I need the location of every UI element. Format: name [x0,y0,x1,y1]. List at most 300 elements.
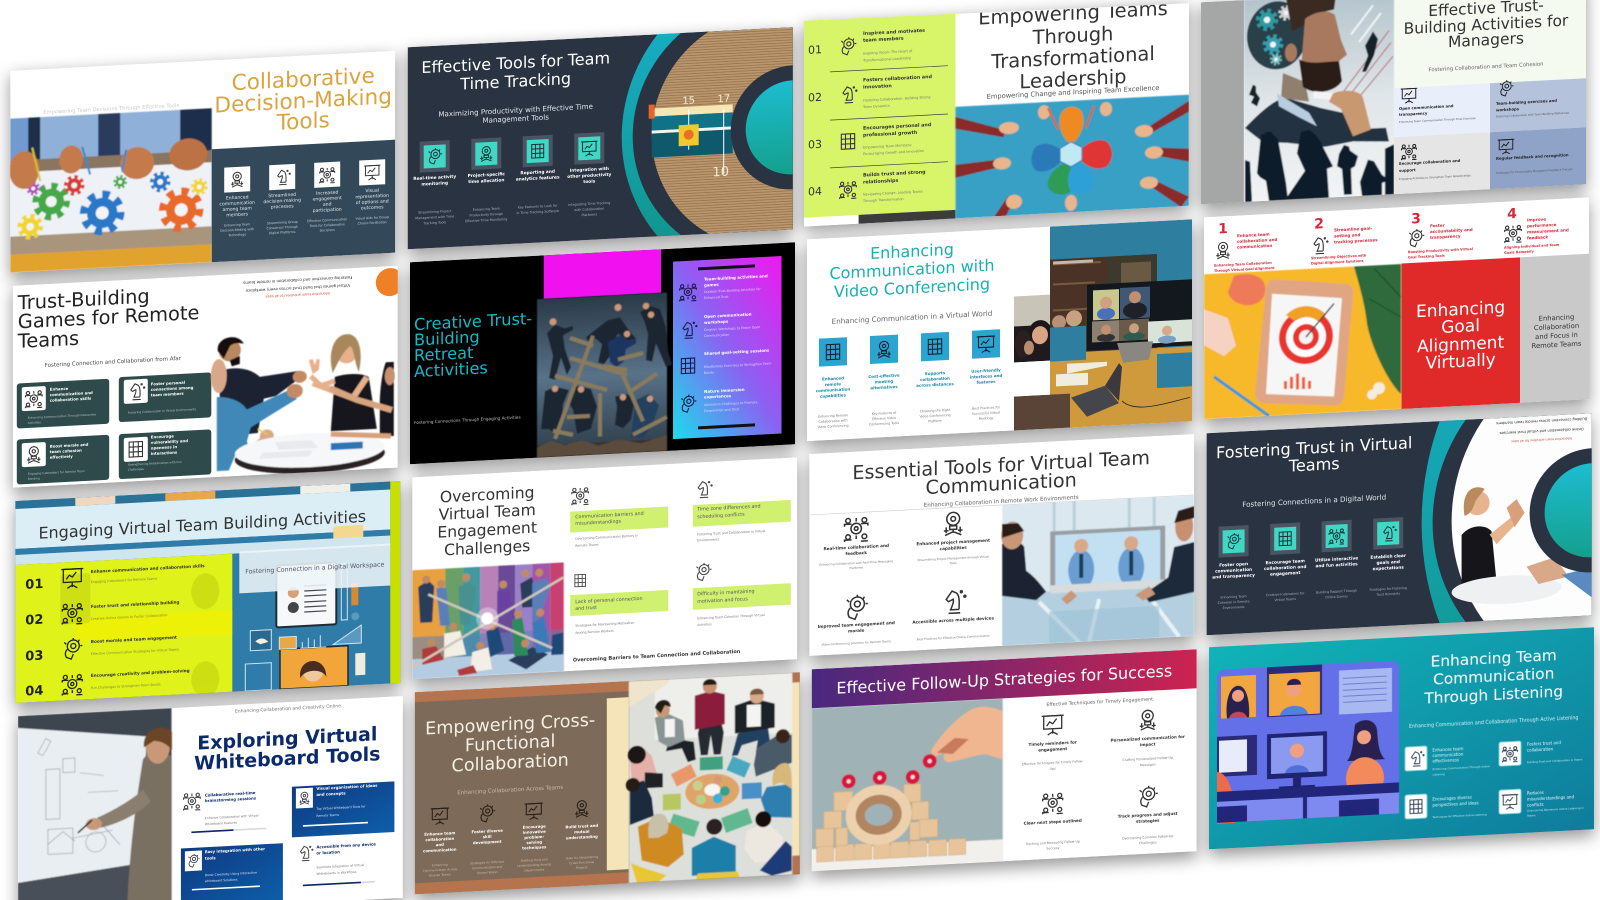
grey subtitle panel: Enhancing [1539,313,1574,323]
dark feature panel: Enhancing Team [224,222,250,228]
panel: Enhancing Team Communication Through Listening slide [1209,627,1594,849]
tool features grid: capabilities [940,545,967,551]
listening benefits [1405,738,1584,824]
goals list strip: Aligning Individual and Team [1504,243,1560,250]
challenge cards: scheduling conflicts [697,512,745,520]
goals list strip: Streamline goal- [1334,226,1373,233]
strategy grid: Overcoming Common Follow-Up [1122,834,1173,841]
cards: Encourage [151,433,174,440]
panel: Overcoming Virtual Team Engagement Challenges slide [412,457,797,679]
feature columns: development [473,839,502,845]
tiles: manager activities: support [1399,167,1416,173]
panel: Enhancing Goal Alignment Virtually slide [1204,197,1589,419]
challenge cards: Enhancing Team Cohesion Through Virtual [697,613,765,620]
white cards: brainstorming sessions [205,795,257,803]
numbered list: professional growth [863,130,918,139]
subtitle: Management Tools [482,112,549,125]
feature icons row: Virtual Teams [1274,597,1296,602]
blue cards: Remote Teams [316,813,339,818]
subtitle: Fostering Collaboration and Team Cohesion [1429,61,1543,73]
feature columns: Conferencing Tools [869,421,899,426]
cards: interactions [151,450,178,456]
feature columns: interfaces and [970,373,1002,380]
challenge cards: Communication barriers and [575,511,644,520]
dark feature panel: Technology [227,232,246,237]
goals list strip: feedback [1527,234,1548,241]
dark feature panel: members [226,211,249,219]
title: Functional [465,732,555,756]
panel: Essential Tools for Virtual Team Communication slide [809,434,1194,656]
cards: vulnerability and [151,438,188,445]
feature icons row: Foster open [1219,561,1248,569]
feature columns: Enhance team [424,830,455,837]
feature icons row: Integration with [570,166,609,174]
gradient activity panel: games [704,282,719,288]
feature columns: communication [423,847,457,853]
feature columns: meeting [875,379,893,384]
graphic: circular wood clock photo: 10 [712,165,729,180]
feature icons row: Reporting and [520,169,555,176]
feature icons row: in Time Tracking Software [516,209,559,215]
feature columns: and [436,842,444,847]
photo: colleagues high-five at table [211,329,395,478]
gradient activity panel: Cooperation and Trust [704,407,740,413]
numbered list [808,27,948,206]
goals list strip: 3 [1411,211,1421,228]
goals list strip: 1 [1218,221,1228,238]
gradient activity panel: Bonds [704,370,714,375]
feature columns: Cross-Functional [569,860,594,865]
feature columns: techniques [522,844,547,851]
photo: hand placing pin on wooden blocks [812,698,1003,871]
dark feature panel [212,140,395,262]
challenge cards: Lack of personal connection [575,596,643,605]
yellow numbered panel: Fun Challenges to Strengthen Team Bonds [91,682,161,690]
feature icons row: and fun activities [1315,561,1358,569]
title: Essential Tools for Virtual Team [852,446,1150,484]
tool features grid: Streamlining Project Management through Virtual [917,554,989,562]
goals list strip: collaboration and [1237,237,1277,244]
title: Virtual Team [439,501,536,524]
tool features grid [818,510,995,647]
blue cards: Top Virtual Whiteboard Tools for [315,804,366,811]
feature columns: Strategies for Effective [470,860,505,865]
dark feature panel: Streamlined [268,192,296,199]
tool features grid: Best Practices for Effective Online Communication [917,634,990,641]
title: Communication [926,468,1077,499]
tiles: manager activities: Fostering Collaboration with Team-Building Workshops [1496,111,1570,118]
photo: diverse team pulling ropes [412,562,564,679]
dark feature panel: Tools for Collaborative [309,222,345,228]
white cards: Collaborative real-time [205,790,256,798]
feature columns [423,799,598,878]
numbered list: Inspiring Vision: The Heart of [863,49,913,56]
cards: team members [151,391,184,398]
panel: Effective Trust-Building Activities for Managers slide [1201,0,1586,204]
upside-down header text: Virtual games that build trust across every workplace [245,283,350,294]
upside-down header text: Online collaboration and virtual trust exercises [1499,427,1584,435]
tiles: manager activities: Engaging Activities to Strengthen Team Relationships [1399,173,1471,181]
numbered list: 01 [808,43,822,57]
numbered list: relationships [863,178,898,186]
dark feature panel: Streamlining Group [267,220,298,225]
strategy grid: Effective Techniques for Timely Follow- [1022,759,1084,766]
panel: Fostering Trust in Virtual Teams slide [1207,201,1600,826]
feature icons row: other productivity [567,172,612,180]
title: Activities [414,358,488,381]
feature icons row: tools [583,179,596,185]
title: Challenges [444,537,530,559]
tiles: manager activities: transparency [1399,111,1428,117]
numbered list: Team Dynamics [862,104,890,109]
subtitle: Maximizing Productivity with Effective Time [438,102,593,119]
challenge cards: and trust [575,605,597,612]
cards: team cohesion [50,448,82,454]
tool features grid: Real-time collaboration and [823,543,889,551]
title: Transformational [990,42,1155,74]
upside-down header text: Interactive team activities for all sizes [1511,436,1572,443]
gradient activity panel: Outdoor Trust-Building Activities for [704,287,761,294]
cards: Fostering Collaboration in Virtual Environments [128,407,197,415]
blue cards: Boost Creativity Using Interactive [205,871,257,877]
feature icons row: Project-specific [468,171,505,179]
listening benefits: misunderstandings and [1527,794,1574,802]
panel: Effective Tools for Team Time Tracking slide [408,27,793,250]
strategy grid: Messages [1140,762,1156,767]
yellow numbered panel: Engaging Icebreakers for Remote Teams [91,577,158,584]
upside-down header text: Building connection across remote team members [1496,417,1587,425]
goals list strip [1214,203,1569,273]
blue cards: and concepts [316,790,346,797]
feature icons row: Establish clear [1370,553,1407,561]
red title panel [1402,257,1520,409]
title: Whiteboard Tools [194,743,380,775]
yellow numbered panel: 03 [25,649,43,664]
dark feature panel: Decisions [320,228,335,233]
numbered list: Inspires and motivates [863,28,925,37]
strategy grid: Crafting Personalized Follow-Up [1123,756,1173,762]
feature icons row: Creative Icebreakers for [1266,591,1305,597]
photo: team sitting in a circle [626,672,800,883]
challenge cards: motivation and focus [697,596,748,605]
title: Collaboration [452,751,569,777]
feature columns: understanding [566,834,598,840]
goals list strip: Foster [1430,223,1445,228]
subtitle: Fostering Connections in a Digital World [1242,493,1386,509]
title: Engagement [437,519,537,542]
title: Building [414,327,480,350]
tool features grid: Accessible across multiple devices [912,615,995,625]
dark feature panel: of options and [356,198,389,206]
blue cards: whiteboard Solutions [205,878,238,883]
dark feature panel: Visual Aids for Group [356,215,389,221]
tool features grid: Enhanced project management [916,538,990,546]
feature columns: Key Features of [872,411,897,416]
title: Through Listening [1423,682,1563,707]
red title panel: Enhancing [1416,298,1505,322]
title: Fostering Trust in Virtual [1216,433,1412,462]
challenge cards: Among Remote Workers [575,629,614,635]
subtitle: Effective Techniques for Timely Engagement [1046,697,1153,708]
title: Communication with [829,256,995,283]
goals list strip: Goal Tracking Tools [1408,254,1445,260]
numbered list: Empowering Team Members: [863,143,912,150]
graphic: circular photo of team high-five [1422,201,1600,815]
feature columns: Enhancing [432,863,448,867]
tiles: manager activities: Enhancing Team Communication Through Trust Exercises [1399,116,1476,124]
feature columns: communication [816,386,850,393]
red title panel: Alignment [1417,333,1504,357]
title: Enhancing Team [1431,646,1557,671]
dark feature panel: Decision-Making with [220,227,254,233]
feature icons row: Enhancing Team [1221,594,1247,600]
dark feature panel: engagement [313,195,342,203]
title: Overcoming [440,484,535,506]
feature icons row: monitoring [421,180,448,188]
goals list strip: Boosting Productivity with Virtual [1408,247,1473,254]
dark feature panel: Enhanced [226,194,249,201]
cards: Strengthening Relationships with Fun [128,460,182,467]
challenge cards: Strategies for Maintaining Motivation [575,621,634,628]
subtitle: Fostering Connection and Collaboration from Afar [45,356,182,369]
feature icons row: communication [1215,567,1252,575]
challenge cards: Environments [697,537,720,542]
red title panel: Virtually [1425,350,1496,374]
feature icons row: collaboration and [1264,564,1306,572]
feature columns: Enhanced [822,375,844,382]
listening benefits: Teams [1526,813,1536,818]
numbered list: Navigating Change: Leading Teams [863,190,923,197]
feature icons row: Strategies for Fostering [1369,586,1407,592]
dark feature panel: communication [219,200,255,208]
cards: effectively [50,454,73,460]
title: Games for Remote [18,301,199,333]
strategy grid: Success [1046,846,1059,851]
feature icons row: Cohesion in Remote [1218,599,1250,605]
feature icons row: analytics features [516,174,560,183]
challenge cards: Activities [697,622,712,627]
listening benefits: Encourages diverse [1433,795,1472,802]
red title panel: Goal [1441,316,1480,338]
feature columns: problem- [524,834,544,840]
feature columns: User-friendly [971,367,1001,374]
goals list strip: transparency [1430,233,1461,240]
blue cards [181,781,394,900]
challenge cards: Remote Teams [575,543,599,548]
photo: bearded man profile with gears [1244,0,1394,202]
feature columns: Effective Video [872,416,896,421]
gradient activity panel: Mindfulness Exercises to Strengthen Team [704,362,771,369]
cards: communication and [50,390,93,397]
feature icons row: Encourage team [1266,558,1305,566]
tiles: manager activities: Strategies for Encouraging Managerial Feedback Process [1496,167,1573,175]
feature columns: capabilities [820,392,847,399]
feature icons row: Enhancing Team [473,207,500,212]
goals list strip: performance [1527,222,1557,229]
grey subtitle panel [1520,254,1589,403]
title: Leadership [1019,65,1127,93]
listening benefits: Building Trust and Collaboration in Teams [1527,757,1583,764]
challenge cards: misunderstandings [575,519,622,527]
numbered list: 04 [808,185,822,198]
gradient activity panel: Enhanced Trust [704,295,729,300]
yellow numbered panel: Effective Communication Strategies for Virtual Teams [91,647,179,656]
numbered list: Encourages personal and [863,122,932,132]
yellow numbered panel: 01 [25,577,43,593]
feature columns: Communication and [472,865,502,870]
goals list strip: communication [1237,243,1272,250]
graphic: circular wood clock photo: 17 [717,94,730,105]
numbered list: 03 [808,138,822,151]
feature columns: Build trust and [565,823,598,829]
panel: Creative Trust-Building Retreat Activities slide [410,242,795,464]
feature columns: Foster diverse [471,828,503,834]
title: Managers [1448,29,1524,51]
top caption: Enhancing Collaboration and Creativity Online [235,703,341,715]
upside-down header text: Interactive team activities for all sizes [265,291,330,299]
strategy grid: impact [1140,741,1156,747]
cards [17,372,211,484]
blue cards: Easy integration with other [205,846,265,854]
feature icons row [1212,517,1407,611]
photo: phone with target on yellow [1204,264,1402,419]
strategy grid: strategies [1136,818,1160,824]
numbered list: Builds trust and strong [863,169,926,179]
yellow numbered panel: Boost morale and team engagement [91,635,177,644]
strategy grid: Ups [1050,767,1056,771]
goals list strip: accountability and [1430,227,1473,234]
numbered list: Encouraging Growth and Innovation [863,149,924,156]
challenge cards [570,477,791,635]
feature columns: Departments [524,868,544,873]
feature icons row: Effective Time Monitoring [465,217,507,223]
tool features grid: Platforms [849,565,864,570]
goals list strip: tracking processes [1334,237,1378,245]
challenge cards: Difficulty in maintaining [697,588,755,597]
panel: Collaborative Decision-Making Tools slide [9,51,395,273]
cards: Challenges [128,467,144,472]
feature icons row: Utilize interactive [1315,555,1358,564]
feature columns: Projects [576,865,588,870]
numbered list: team members [863,36,904,44]
subtitle: Empowering Change and Inspiring Team Excellence [987,84,1159,101]
title: Collaborative [232,64,375,96]
header band [812,649,1197,708]
feature icons row: Key Features to Look for [518,203,558,210]
yellow numbered panel: 02 [25,613,43,628]
feature icons row: goals and [1376,559,1400,566]
panel: Trust-Building Games for Remote Teams slide [13,265,404,489]
background illustration [15,482,390,703]
subtitle box: Fostering Connection in a Digital Workspace [245,561,385,576]
cards: collaboration skills [50,396,92,403]
title: Tools [276,108,330,136]
gradient activity panel: Creative Workshops to Foster Open [704,325,760,332]
strategy grid [1022,708,1185,852]
dark feature panel: Increased [316,190,338,197]
title: Trust-Building [17,285,150,314]
tool features grid: Enhancing Collaboration with Real-Time Messaging [819,559,893,567]
subtitle box [239,544,390,593]
photo: hands drawing gears on a table [9,108,212,273]
feature columns: Collaboration with [818,418,848,424]
subtitle: Enhancing Collaboration in Remote Work Environments [924,495,1079,509]
grey subtitle panel: Collaboration [1534,322,1579,332]
goals list strip: Improve [1527,217,1546,223]
feature columns: collaboration [920,376,950,382]
feature columns: Communication Across [423,867,457,873]
panel: Empowering Teams Through Transformational Leadership slide [804,0,1189,227]
upside-down header text [243,276,352,298]
white cards: Enhance Collaboration with Virtual [205,813,259,820]
white cards [184,784,376,892]
strategy grid: Tracking and Measuring Follow-Up [1025,839,1080,846]
panel: Engaging Virtual Team Building Activities slide [15,481,400,707]
listening benefits: communication [1433,752,1464,758]
strategy grid: Personalized communication for [1111,734,1185,743]
yellow numbered panel: Enhance communication and collaboration skills [91,563,205,574]
dark feature panel: processes [271,203,294,211]
feature columns: Supports [925,370,946,376]
magenta block [544,249,661,299]
dark feature panel: Effective Communication [307,217,347,223]
graphic: circular wood clock photo: 15 [682,95,695,107]
photo: hands around coloured hexagon [956,95,1189,219]
gradient activity panel: Adventure Challenges to Promote [704,400,758,407]
white cards: Accessible from any device [316,841,376,849]
title: Teams [17,327,79,353]
blue cards: Visual organization of ideas [316,783,378,791]
title: Creative Trust- [414,309,532,334]
gradient activity panel: Team-building activities and [704,273,768,282]
subtitle: Empowering Team Decisions Through Effective Tools [43,103,179,116]
feature icons row: expectations [1373,565,1404,572]
feature columns: Diverse Teams [429,872,451,878]
white cards: Whiteboard Features [205,821,237,826]
listening benefits: Fosters trust and [1527,740,1561,747]
feature icons row: Real-time activity [413,174,456,182]
feature columns: Video Conferencing [817,424,849,429]
title: Engaging Virtual Team Building Activities [38,507,366,543]
photo: video meeting boardroom [1001,495,1194,646]
title: Effective Tools for Team [421,48,610,77]
tool features grid: feedback [845,550,867,556]
photo: man drawing on whiteboard [18,708,172,900]
subtitle: Fostering Connections Through Engaging Activities [414,415,521,425]
cards: Bonding [28,476,40,481]
feature icons row: Streamlining Project [418,209,452,215]
yellow numbered panel: Encourage creativity and problem-solving [91,668,190,678]
gradient activity panel: experiences [704,393,732,400]
goals list strip: 2 [1314,216,1324,233]
feature icons row: Integrating Time Tracking [568,201,610,207]
gradient activity panel: Communication [704,333,729,338]
graphic: circular wood clock photo [622,27,793,236]
photo: businessmen on wooden tower [537,292,672,458]
feature columns: Cost-effective [868,372,900,379]
grey subtitle panel: Remote Teams [1532,340,1582,350]
feature columns: Successful Virtual [972,410,1000,416]
dark feature panel: Digital Platforms [269,230,296,235]
feature columns: Building Trust and [521,857,548,863]
listening benefits: Reduces [1527,790,1544,796]
header band: Effective Follow-Up Strategies for Success [836,661,1172,698]
listening benefits: perspectives and ideas [1433,800,1479,808]
strategy grid: Challenges [1139,840,1157,845]
strategy grid: Track progress and adjust [1118,811,1178,819]
numbered list: Through Transformation [862,197,904,203]
feature columns: Understanding Among [517,862,551,868]
